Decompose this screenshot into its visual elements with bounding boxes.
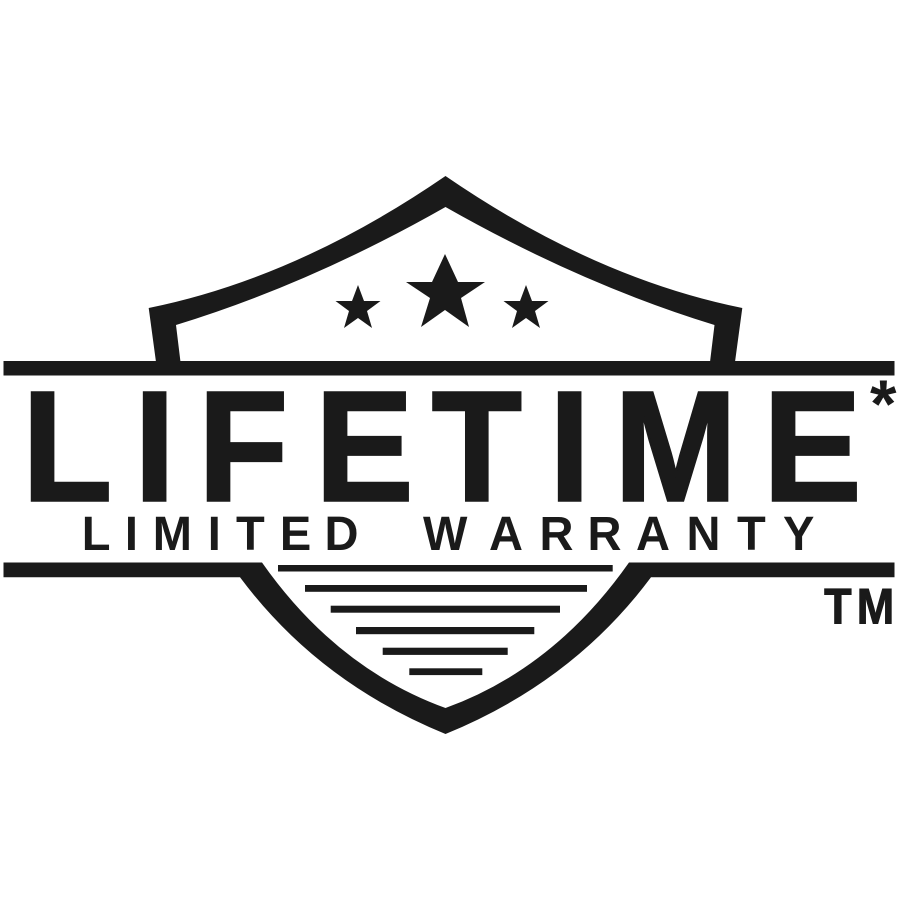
top horizontal bar — [4, 361, 894, 376]
limited warranty subheading: LIMITED WARRANTY — [82, 507, 814, 561]
shield top outline — [149, 176, 742, 362]
shield bottom outline with side bars — [4, 562, 894, 734]
shield stripes — [278, 565, 613, 675]
trademark: TM — [824, 579, 894, 635]
LIFETIME heading: LIFETIME — [22, 359, 862, 535]
three stars — [336, 254, 548, 328]
asterisk: * — [870, 366, 897, 442]
